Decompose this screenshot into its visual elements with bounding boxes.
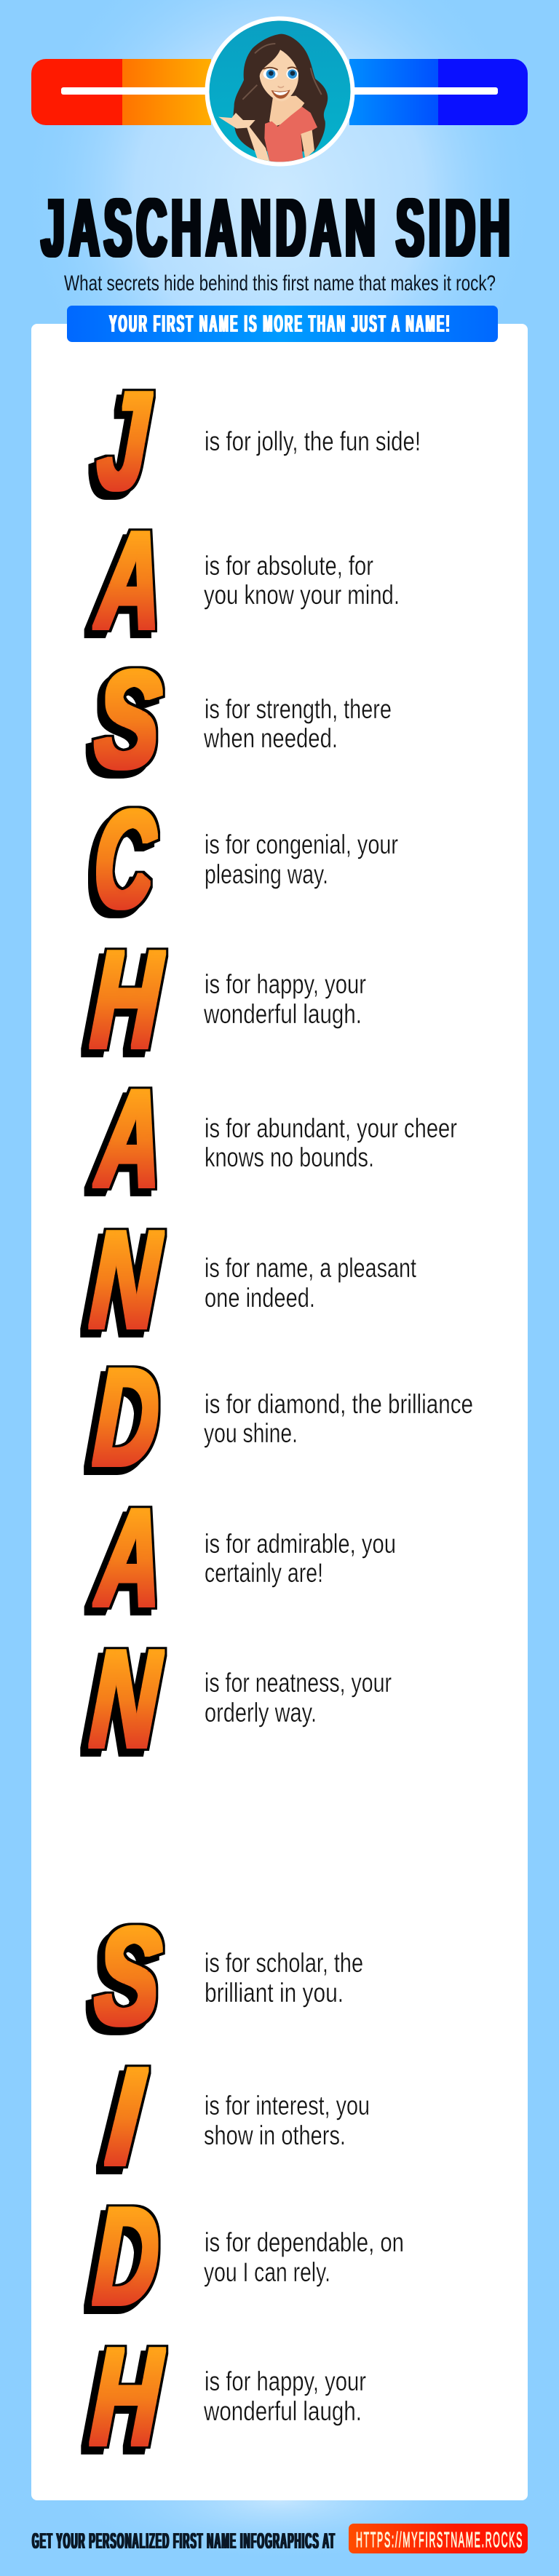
lines: happy: [203, 969, 366, 1029]
lines: happy: is for happy, your: [205, 2366, 366, 2396]
header colour bar: [31, 59, 528, 125]
white content panel: [31, 324, 528, 2500]
lines: absolute: you know your mind.: [204, 580, 400, 610]
lines: happy: wonderful laugh.: [203, 2396, 362, 2426]
row: D: [91, 2179, 404, 2334]
lines: diamond: [204, 1389, 473, 1448]
lines: name: is for name, a pleasant: [205, 1253, 417, 1283]
lines: interest: is for interest, you: [205, 2091, 370, 2120]
lines: neatness: [205, 1668, 392, 1728]
lines: absolute: is for absolute, for: [205, 551, 373, 581]
row: A: [92, 1061, 457, 1216]
letter H: H: [88, 923, 166, 1077]
letter H: H: [88, 2320, 166, 2474]
letter N: N: [87, 1204, 164, 1357]
letter I: I: [102, 2039, 149, 2194]
lines: scholar: brilliant in you.: [205, 1978, 344, 2008]
row: S: [92, 642, 392, 797]
lines: happy: is for happy, your: [205, 969, 366, 999]
lines: neatness: orderly way.: [205, 1698, 317, 1728]
lines: happy: wonderful laugh.: [203, 999, 362, 1029]
lines: abundant: [205, 1113, 457, 1172]
row: A: [92, 1480, 396, 1635]
letter N: N: [87, 1623, 164, 1776]
row: I: [102, 2039, 370, 2194]
line: jolly: is for jolly, the fun side!: [205, 426, 421, 456]
letter D: D: [91, 1340, 162, 1495]
lines: strength: when needed.: [203, 723, 338, 753]
lines: strength: is for strength, there: [205, 694, 392, 724]
row: A: [92, 503, 400, 658]
lines: dependable: you I can rely.: [204, 2257, 330, 2287]
lines: abundant: is for abundant, your cheer: [205, 1113, 457, 1143]
banner: [67, 306, 498, 342]
letter D: D: [91, 2179, 162, 2334]
lines: dependable: [204, 2227, 404, 2287]
lines: admirable: is for admirable, you: [205, 1529, 396, 1559]
lines: dependable: is for dependable, on: [205, 2227, 404, 2257]
letter S: S: [92, 1899, 164, 2054]
row: N: [87, 1204, 417, 1357]
avatar: cartoon woman in a circle: [207, 19, 352, 164]
lines: interest: [204, 2091, 370, 2150]
lines: scholar: [205, 1948, 363, 2008]
lines: scholar: is for scholar, the: [205, 1948, 363, 1978]
row: D: [91, 1340, 473, 1495]
lines: congenial: [205, 830, 398, 889]
row: J: [95, 363, 421, 518]
lines: congenial: pleasing way.: [205, 859, 328, 889]
lines: interest: show in others.: [204, 2120, 346, 2150]
letter A: A: [92, 1061, 166, 1216]
footer url button: [349, 2524, 528, 2553]
lines: neatness: is for neatness, your: [205, 1668, 392, 1698]
letter A: A: [92, 503, 166, 658]
lines: absolute: [204, 551, 400, 610]
letter C: C: [91, 783, 159, 937]
lines: diamond: is for diamond, the brilliance: [205, 1389, 473, 1419]
lines: admirable: certainly are!: [205, 1558, 323, 1588]
lines: diamond: you shine.: [204, 1418, 298, 1448]
lines: name: one indeed.: [205, 1283, 315, 1313]
lines: congenial: is for congenial, your: [205, 830, 398, 859]
row: N: [87, 1623, 392, 1776]
lines: admirable: [205, 1529, 396, 1588]
lines: strength: [203, 694, 392, 753]
row: C: [91, 783, 398, 937]
row: H: [88, 2320, 366, 2474]
lines: abundant: knows no bounds.: [205, 1142, 374, 1172]
lines: name: [205, 1253, 417, 1313]
row: H: [88, 923, 366, 1077]
row: S: [92, 1899, 363, 2054]
letter S: S: [92, 642, 164, 797]
lines: happy: [203, 2366, 366, 2426]
letter A: A: [92, 1480, 166, 1635]
letter J: J: [95, 363, 154, 518]
